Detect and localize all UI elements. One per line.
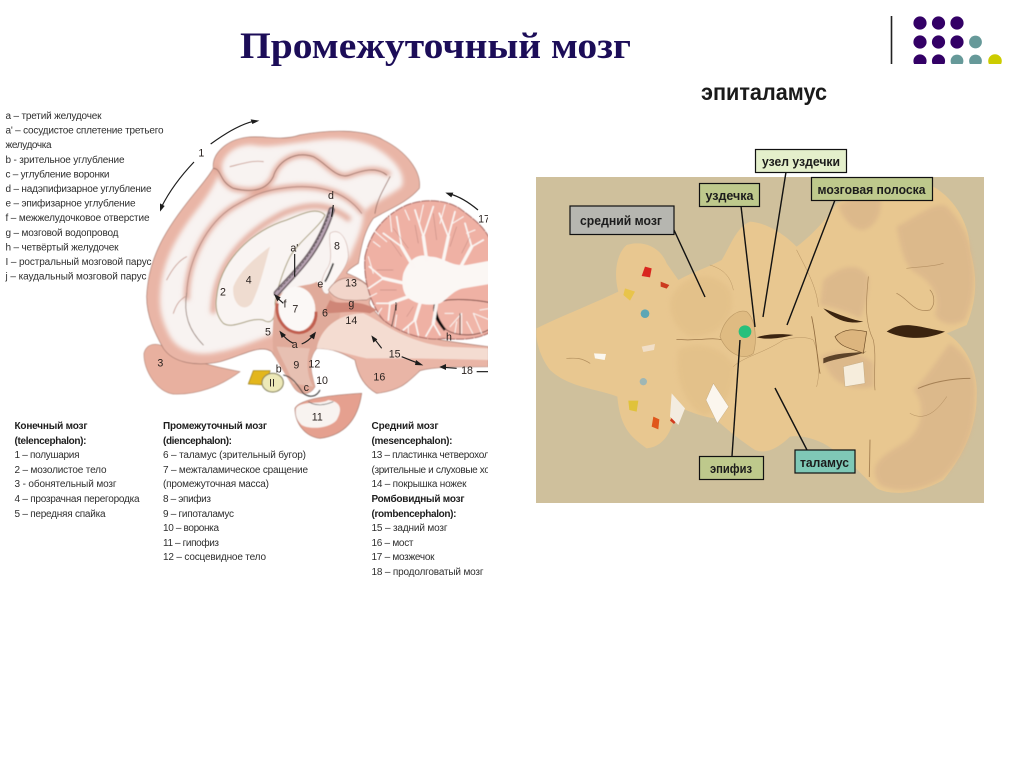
diagram numbers: f	[284, 298, 287, 310]
legend: diencephalon: 8 – эпифиз	[163, 493, 211, 505]
diagram numbers: a	[292, 339, 298, 351]
legend: mesencephalon and rhombencephalon: (зрительные и слуховые холмы)	[372, 465, 512, 476]
label: уздечка: уздечка	[706, 188, 754, 203]
transparent septum	[233, 247, 270, 307]
legend: ventricles and recesses: I – ростральный мозговой парус	[6, 257, 152, 268]
paper tags	[594, 267, 865, 429]
legend: mesencephalon and rhombencephalon	[372, 422, 488, 577]
diagram numbers: 8	[334, 241, 340, 253]
olfactory brain	[144, 344, 240, 394]
label: эпифиз	[700, 456, 764, 480]
legend: ventricles and recesses: j – каудальный мозговой парус	[4, 272, 146, 282]
legend: telencephalon: (telencephalon):	[14, 436, 86, 447]
cerebellar white matter	[402, 256, 493, 305]
cerebral aqueduct	[323, 300, 377, 313]
diagram numbers: 12	[308, 359, 320, 371]
legend: ventricles and recesses	[4, 111, 164, 282]
diagram numbers: 1	[198, 148, 204, 160]
legend: mesencephalon and rhombencephalon: 18 – продолговатый мозг	[372, 567, 484, 578]
diagram numbers: 16	[373, 372, 385, 384]
legend: telencephalon: Конечный мозг	[14, 421, 88, 432]
legend: ventricles and recesses: b - зрительное углубление	[6, 154, 125, 166]
title: Промежуточный мозг	[240, 26, 631, 67]
legend: ventricles and recesses: d – надэпифизарное углубление	[6, 183, 152, 195]
label: таламус	[795, 450, 855, 473]
legend: ventricles and recesses: e – эпифизарное углубление	[6, 198, 136, 210]
legend: diencephalon: 11 – гипофиз	[163, 537, 219, 549]
legend: ventricles and recesses: c – углубление воронки	[6, 168, 110, 180]
quadrigeminal plate	[328, 278, 372, 300]
hemisphere and brainstem silhouette	[147, 131, 488, 394]
sulci	[187, 155, 390, 313]
label: средний мозг: средний мозг	[580, 213, 663, 228]
pineal body	[720, 311, 755, 357]
label: мозговая полоска: мозговая полоска	[818, 182, 926, 197]
diagram numbers: 17	[478, 214, 490, 226]
legend: diencephalon: 12 – сосцевидное тело	[163, 552, 266, 563]
legend: mesencephalon and rhombencephalon: 16 – мост	[372, 538, 414, 549]
diagram numbers	[157, 148, 490, 424]
tegmentum	[317, 313, 488, 360]
choroid plexus	[277, 210, 332, 293]
diagram numbers: c	[304, 382, 310, 394]
diagram numbers: 13	[345, 278, 357, 290]
epiphysis	[322, 232, 348, 294]
legend: mesencephalon and rhombencephalon: (mesencephalon):	[372, 436, 452, 447]
legend: telencephalon: 3 - обонятельный мозг	[14, 478, 117, 490]
legend: diencephalon: 7 – межталамическое сращение	[163, 465, 308, 476]
thalamus mounds	[670, 276, 735, 415]
legend: mesencephalon and rhombencephalon: Ромбовидный мозг	[372, 493, 464, 505]
label: средний мозг	[570, 206, 674, 234]
brain specimen silhouette	[536, 186, 977, 493]
thalamic pink wall	[273, 282, 340, 394]
diagram numbers: 5	[265, 327, 271, 339]
diagram numbers: 3	[157, 357, 163, 369]
label: уздечка	[700, 184, 760, 206]
legend: ventricles and recesses: f – межжелудочковое отверстие	[6, 213, 150, 224]
corpus callosum	[216, 211, 325, 325]
fissure lines	[567, 250, 970, 477]
legend: mesencephalon and rhombencephalon: (rombencephalon):	[372, 509, 456, 520]
diagram numbers: e	[317, 278, 323, 290]
legend: telencephalon: 4 – прозрачная перегородка	[14, 494, 140, 505]
legend: diencephalon: 9 – гипоталамус	[163, 509, 234, 520]
heading: epithalamus: эпиталамус	[701, 79, 827, 105]
leader lines	[674, 172, 835, 456]
optic chiasm	[248, 371, 320, 396]
diagram numbers: d	[328, 190, 334, 202]
diagram numbers: 14	[345, 315, 357, 327]
diagram numbers: i	[395, 302, 397, 314]
legend: telencephalon: 5 – передняя спайка	[14, 509, 106, 520]
legend: diencephalon	[163, 421, 308, 563]
diagram numbers: 7	[292, 304, 298, 316]
diagram numbers: g	[348, 298, 354, 310]
diagram numbers: b	[276, 363, 282, 375]
legend: ventricles and recesses: g – мозговой водопровод	[6, 228, 119, 239]
central dark fissures	[757, 308, 945, 363]
diagram numbers: 2	[220, 287, 226, 299]
cerebellum	[365, 201, 493, 339]
diagram numbers: 15	[389, 349, 401, 361]
diagram numbers: II	[269, 378, 275, 390]
diagram numbers: 11	[312, 412, 323, 424]
legend: mesencephalon and rhombencephalon: 15 – задний мозг	[372, 523, 448, 534]
legend: telencephalon: 1 – полушария	[14, 450, 80, 461]
legend: ventricles and recesses: желудочка	[6, 140, 52, 151]
diagram numbers: 4	[246, 274, 252, 286]
legend: mesencephalon and rhombencephalon: Средний мозг	[372, 421, 438, 432]
legend: ventricles and recesses: h – четвёртый желудочек	[6, 242, 119, 254]
legend: telencephalon: 2 – мозолистое тело	[14, 465, 107, 476]
label: узел уздечки: узел уздечки	[762, 154, 840, 169]
cortex shading	[820, 196, 975, 490]
label: мозговая полоска	[812, 178, 932, 200]
label: эпифиз: эпифиз	[710, 461, 752, 476]
legend: mesencephalon and rhombencephalon: 14 – покрышка ножек	[372, 479, 467, 490]
legend: diencephalon: (промежуточная масса)	[163, 479, 269, 490]
label: узел уздечки	[756, 150, 846, 172]
legend: diencephalon: 10 – воронка	[163, 523, 219, 534]
legend: telencephalon	[14, 421, 140, 520]
diagram numbers: h	[446, 331, 452, 343]
diagram numbers: a'	[290, 243, 298, 255]
legend: mesencephalon and rhombencephalon: 13 – пластинка четверохолмия	[372, 450, 506, 461]
legend: ventricles and recesses: а' – сосудистое сплетение третьего	[6, 126, 164, 136]
photo panel: dissected brain	[536, 177, 984, 503]
arrows	[160, 119, 488, 372]
interthalamic adhesion	[277, 287, 316, 333]
diagram numbers: 6	[322, 307, 328, 319]
pituitary gland	[295, 393, 362, 438]
diagram numbers: 10	[316, 375, 328, 387]
legend: diencephalon: 6 – таламус (зрительный бугор)	[163, 449, 306, 461]
label: таламус: таламус	[800, 455, 849, 470]
legend: diencephalon: Промежуточный мозг	[163, 421, 267, 432]
legend: diencephalon: (diencephalon):	[163, 436, 232, 447]
legend: mesencephalon and rhombencephalon: 17 – мозжечок	[372, 552, 435, 563]
brain section diagram	[144, 119, 493, 438]
diagram numbers: 18	[461, 365, 473, 377]
decorative dot cluster	[891, 16, 1002, 68]
white matter of hemisphere	[160, 139, 403, 354]
diagram numbers: 9	[293, 360, 299, 372]
legend: ventricles and recesses: а – третий желудочек	[6, 111, 102, 122]
